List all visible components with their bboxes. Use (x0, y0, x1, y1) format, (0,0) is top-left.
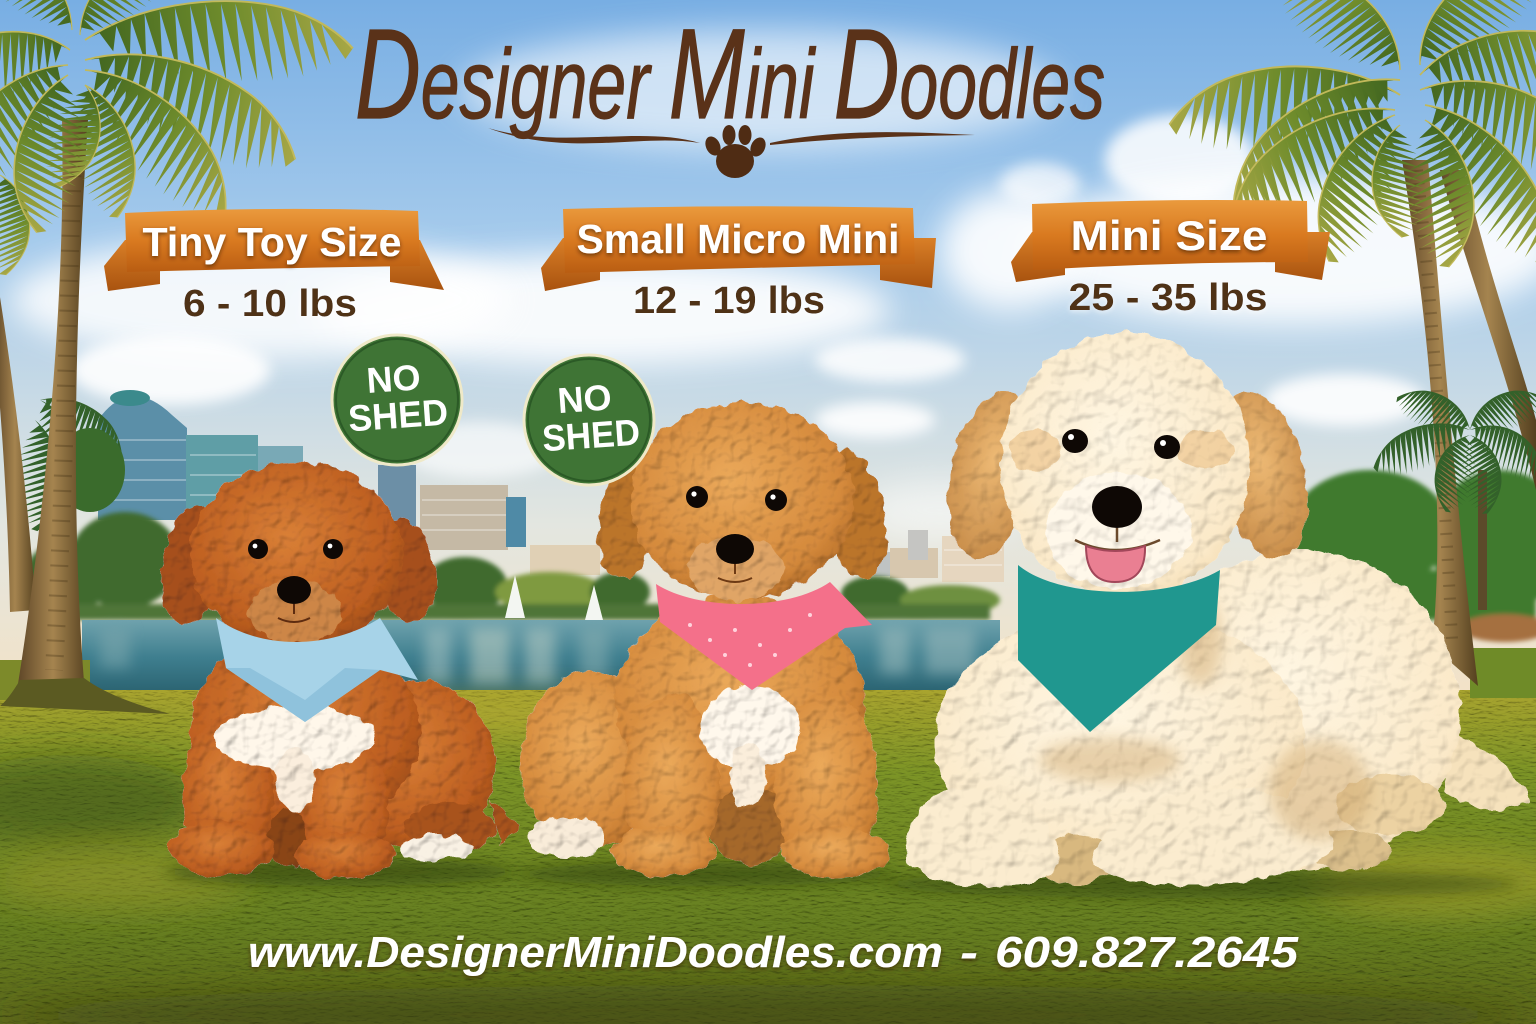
banner: tiny toy size (104, 209, 444, 291)
badge: no shed 2: SHED (541, 412, 641, 459)
palm tree: small left distance (0, 389, 134, 534)
icon: paw print (702, 125, 769, 178)
palm tree: right crown (1168, 0, 1536, 274)
bandana: light blue (216, 618, 418, 722)
badge: no shed 2: NO (556, 376, 613, 421)
dog: tiny toy puppy (154, 462, 520, 886)
website and phone: - (960, 928, 978, 977)
background: right park trees (1280, 470, 1536, 642)
dog shading: soft body shadows (1040, 595, 1370, 840)
background: clouds (10, 30, 1536, 540)
bandana: teal (1018, 565, 1220, 732)
dog: mini size adult (880, 333, 1528, 898)
dog: small micro mini puppy (515, 402, 896, 886)
palm tree: right trunk (1402, 160, 1478, 686)
banner: small micro mini (541, 206, 936, 291)
background: lake (82, 620, 1000, 694)
website and phone: 609.827.2645 (995, 928, 1299, 977)
dog tongue (1086, 546, 1145, 582)
background: city skyline (98, 390, 1004, 582)
weight: 12 - 19 lbs: 12 - 19 lbs (633, 280, 825, 322)
badge: no shed 1 (332, 335, 462, 465)
banner: mini size (1011, 200, 1330, 282)
palm tree: right back trunk (1440, 170, 1536, 490)
bandana: pink (656, 582, 872, 690)
weight: 25 - 35 lbs: 25 - 35 lbs (1068, 277, 1268, 319)
website and phone: www.DesignerMiniDoodles.com (248, 928, 943, 977)
background: far shore trees (25, 512, 1000, 620)
title swash (488, 128, 975, 145)
banner: mini size: Mini Size (1070, 212, 1268, 259)
background: lawn (0, 690, 1536, 1024)
banner: tiny toy size: Tiny Toy Size (142, 219, 402, 265)
badge: no shed 1: NO (365, 356, 422, 401)
palm tree: left (0, 0, 356, 714)
palm tree: small right distance (1369, 373, 1536, 610)
background: sky (0, 0, 1536, 700)
website and phone (248, 928, 1299, 977)
banner: small micro mini: Small Micro Mini (576, 216, 900, 262)
badge: no shed 1: SHED (347, 392, 449, 439)
palm tree: far left (0, 170, 46, 612)
icon: fountains (505, 575, 603, 620)
title: Designer Mini Doodles (355, 3, 1105, 146)
background: lawn light and shade patches (0, 701, 1536, 1024)
background: lake reflections (100, 628, 975, 684)
weight: 6 - 10 lbs: 6 - 10 lbs (183, 283, 357, 325)
badge: no shed 2 (524, 355, 654, 485)
